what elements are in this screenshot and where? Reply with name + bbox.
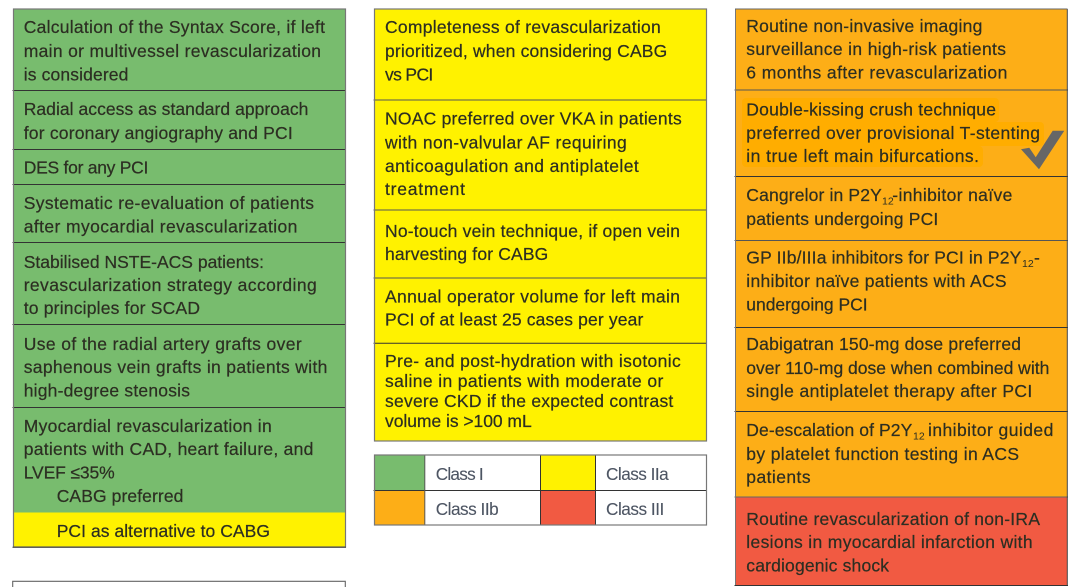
row: Completeness of revascularization: vs PCI xyxy=(385,64,433,84)
row: Annual operator volume: Annual operator volume for left main xyxy=(385,286,680,306)
row: De-escalation: De-escalation of P2Y xyxy=(746,420,913,440)
row: Radial access: for coronary angiography and PCI xyxy=(24,123,293,143)
row: NOAC preferred xyxy=(374,100,706,210)
row: Double-kissing crush with highlight and check mark xyxy=(735,90,1067,176)
row: Completeness of revascularization xyxy=(374,9,706,100)
panel: left column, Class I recommendations xyxy=(12,9,346,547)
row: Routine revascularization of non-IRA, Class III xyxy=(735,497,1067,585)
row: Pre- and post-hydration: Pre- and post-hydration with isotonic xyxy=(385,351,681,371)
row: Radial artery grafts xyxy=(13,324,345,407)
row: Annual operator volume: PCI of at least 25 cases per year xyxy=(385,310,643,330)
legend item: Class I xyxy=(374,456,484,490)
row: Routine imaging surveillance: Routine non-invasive imaging xyxy=(746,16,982,36)
row: GP IIb/IIIa inhibitors: - xyxy=(1034,248,1040,268)
row: PCI as alternative: PCI as alternative to CABG xyxy=(57,521,270,541)
row: Stabilised NSTE-ACS: Stabilised NSTE-ACS patients: xyxy=(24,252,264,272)
row: PCI as alternative xyxy=(13,512,345,547)
row: Cangrelor: Cangrelor in P2Y xyxy=(746,185,882,205)
row: Routine imaging surveillance: surveillance in high-risk patients xyxy=(746,39,1006,59)
row: Systematic re-evaluation: Systematic re-evaluation of patients xyxy=(24,193,314,213)
legend item: Class I: Class I xyxy=(436,464,484,484)
row: De-escalation: by platelet function testing in ACS xyxy=(746,444,1019,464)
row: Cangrelor: 12 xyxy=(882,196,894,208)
row: Syntax Score: Calculation of the Syntax Score, if left xyxy=(24,17,325,37)
row: Myocardial revascularization, CABG preferred: LVEF ≤35% xyxy=(24,462,115,482)
row: Dabigatran: Dabigatran 150-mg dose preferred xyxy=(746,334,1021,354)
legend item: Class III: Class III xyxy=(606,499,664,519)
row: Routine revascularization of non-IRA, Class III: cardiogenic shock xyxy=(746,556,889,576)
legend item: Class IIa: Class IIa xyxy=(606,464,669,484)
row: De-escalation: inhibitor guided xyxy=(928,420,1053,440)
row: Systematic re-evaluation xyxy=(13,184,345,242)
row: Dabigatran: over 110-mg dose when combined with xyxy=(746,358,1049,378)
row: Routine revascularization of non-IRA, Class III: lesions in myocardial infarction with xyxy=(746,532,1033,552)
row: Myocardial revascularization, CABG preferred: Myocardial revascularization in xyxy=(24,416,272,436)
row: No-touch vein xyxy=(374,210,706,278)
row: Radial artery grafts: saphenous vein grafts in patients with xyxy=(24,357,327,377)
row: No-touch vein: harvesting for CABG xyxy=(385,244,548,264)
row: Dabigatran xyxy=(735,328,1067,411)
row: Pre- and post-hydration: volume is >100 mL xyxy=(385,411,532,431)
row: DES xyxy=(13,149,345,184)
row: Radial access xyxy=(13,90,345,149)
row: GP IIb/IIIa inhibitors: GP IIb/IIIa inhibitors for PCI in P2Y xyxy=(746,248,1022,268)
row: Annual operator volume xyxy=(374,278,706,343)
row: Completeness of revascularization: prioritized, when considering CABG xyxy=(385,41,667,61)
panel: middle column, Class IIa recommendations xyxy=(374,9,707,441)
row: Double-kissing crush with highlight and check mark: preferred over provisional T-stenting xyxy=(746,123,1040,143)
row: Stabilised NSTE-ACS xyxy=(13,242,345,324)
row: Syntax Score: is considered xyxy=(24,64,128,84)
row: Routine imaging surveillance: 6 months after revascularization xyxy=(746,62,1007,82)
row: GP IIb/IIIa inhibitors: inhibitor naïve patients with ACS xyxy=(746,271,1007,291)
row: GP IIb/IIIa inhibitors: 12 xyxy=(1022,258,1034,270)
row: De-escalation: 12 xyxy=(913,430,925,442)
row: De-escalation xyxy=(735,411,1067,497)
row: Cangrelor xyxy=(735,176,1067,240)
legend item: Class IIb: Class IIb xyxy=(436,499,499,519)
row: Double-kissing crush with highlight and check mark: Double-kissing crush technique xyxy=(746,100,996,120)
text highlight xyxy=(742,98,1044,167)
panel: cut-off white box below left column xyxy=(13,581,345,587)
row: Routine revascularization of non-IRA, Class III: Routine revascularization of non-IRA xyxy=(746,509,1040,529)
row: Syntax Score: main or multivessel revascularization xyxy=(24,41,321,61)
row: No-touch vein: No-touch vein technique, if open vein xyxy=(385,221,680,241)
legend item: Class IIa xyxy=(540,456,669,490)
row: Stabilised NSTE-ACS: revascularization strategy according xyxy=(24,275,317,295)
row: Stabilised NSTE-ACS: to principles for SCAD xyxy=(24,298,200,318)
row: Pre- and post-hydration: severe CKD if the expected contrast xyxy=(385,391,673,411)
row: Myocardial revascularization, CABG preferred: CABG preferred xyxy=(57,486,183,506)
row: GP IIb/IIIa inhibitors xyxy=(735,240,1067,328)
row: Myocardial revascularization, CABG preferred xyxy=(13,407,345,512)
icon: check mark xyxy=(1021,131,1064,169)
row: De-escalation: patients xyxy=(746,467,811,487)
row: Double-kissing crush with highlight and check mark: in true left main bifurcations. xyxy=(746,146,979,166)
row: NOAC preferred: with non-valvular AF requiring xyxy=(384,132,627,152)
row: Systematic re-evaluation: after myocardial revascularization xyxy=(24,216,297,236)
row: DES: DES for any PCI xyxy=(24,158,148,178)
legend: recommendation classes xyxy=(374,455,707,525)
row: Cangrelor: patients undergoing PCI xyxy=(746,209,938,229)
row: Cangrelor: -inhibitor naïve xyxy=(892,185,1012,205)
row: Radial artery grafts: Use of the radial artery grafts over xyxy=(24,334,302,354)
row: Completeness of revascularization: Completeness of revascularization xyxy=(385,17,661,37)
row: NOAC preferred: treatment xyxy=(385,179,465,199)
row: Dabigatran: single antiplatelet therapy after PCI xyxy=(746,381,1032,401)
row: Pre- and post-hydration xyxy=(374,343,706,441)
row: GP IIb/IIIa inhibitors: undergoing PCI xyxy=(746,294,868,314)
row: Radial artery grafts: high-degree stenosis xyxy=(24,380,190,400)
row: Routine imaging surveillance xyxy=(735,9,1067,90)
row: Radial access: Radial access as standard approach xyxy=(24,99,308,119)
legend item: Class IIb xyxy=(374,490,499,525)
row: NOAC preferred: NOAC preferred over VKA in patients xyxy=(385,108,682,128)
row: Syntax Score xyxy=(13,9,345,90)
panel: right column, Class IIb and Class III recommendations xyxy=(734,9,1068,586)
row: NOAC preferred: anticoagulation and antiplatelet xyxy=(385,156,639,176)
row: Myocardial revascularization, CABG preferred: patients with CAD, heart failure, and xyxy=(24,439,313,459)
row: Pre- and post-hydration: saline in patients with moderate or xyxy=(385,371,663,391)
legend item: Class III xyxy=(540,490,664,525)
